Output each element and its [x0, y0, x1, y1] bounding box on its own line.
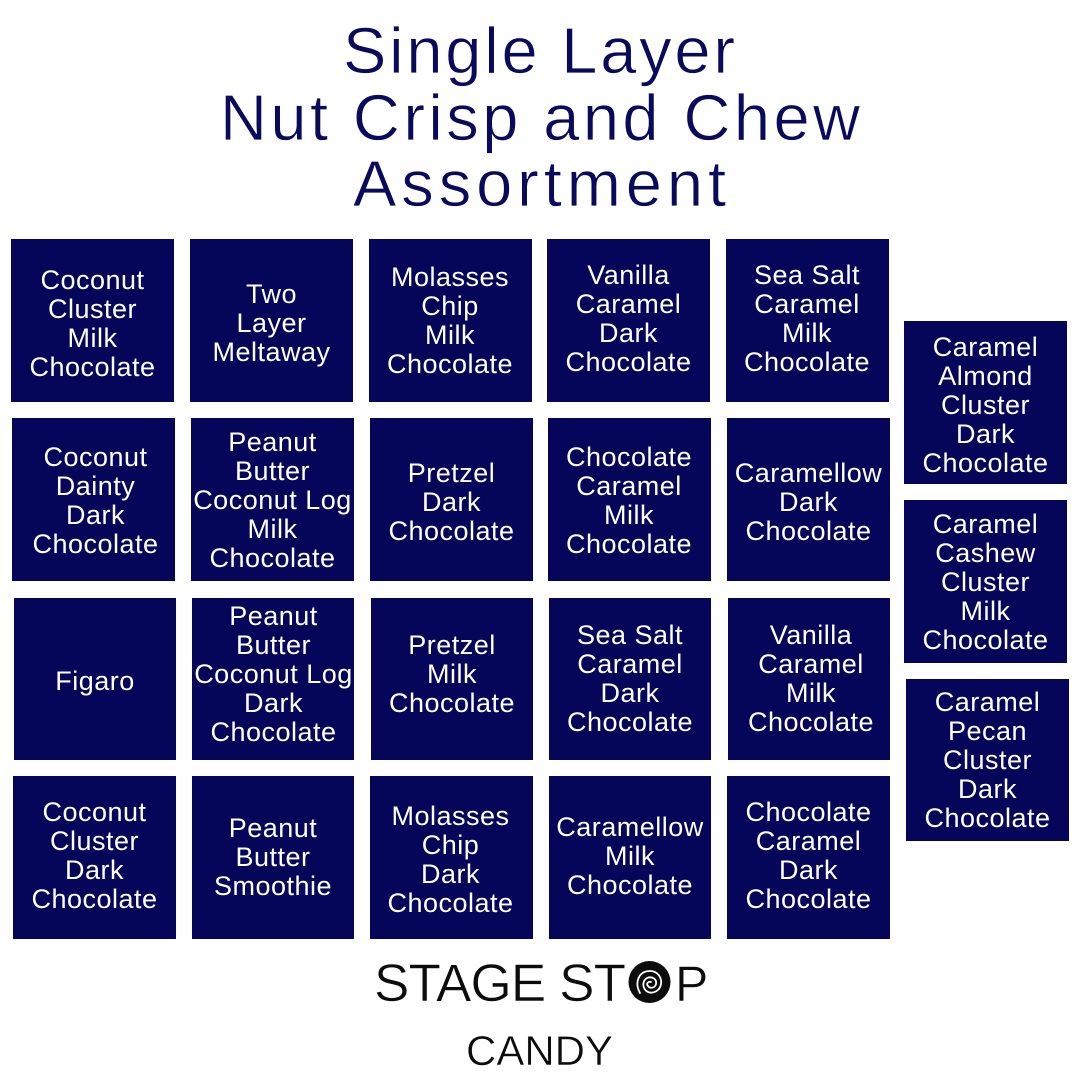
tile: Peanut Butter Smoothie: Butter	[235, 842, 311, 872]
tile: Peanut Butter Coconut Log Dark Chocolate: Chocolate	[210, 717, 337, 747]
tile: Caramel Cashew Cluster Milk Chocolate: Caramel	[933, 509, 1038, 539]
tile: Caramel Cashew Cluster Milk Chocolate: Cluster	[941, 567, 1030, 597]
tile: Molasses Chip Dark Chocolate: Chocolate	[387, 888, 514, 918]
tile: Peanut Butter Smoothie	[192, 776, 354, 939]
tile: Molasses Chip Milk Chocolate: Chip	[421, 291, 479, 321]
tile: Molasses Chip Milk Chocolate: Milk	[425, 320, 475, 350]
title	[220, 14, 861, 220]
tile: Coconut Cluster Dark Chocolate: Coconut	[42, 797, 147, 827]
tile: Sea Salt Caramel Milk Chocolate: Chocolate	[744, 347, 870, 377]
tile: Coconut Dainty Dark Chocolate: Coconut	[43, 442, 148, 472]
tile: Peanut Butter Coconut Log Milk Chocolate: Coconut Log	[193, 485, 352, 515]
tile: Figaro	[14, 598, 176, 760]
tile: Two Layer Meltaway: Two	[246, 279, 297, 309]
tile: Sea Salt Caramel Milk Chocolate: Sea Salt	[754, 260, 860, 290]
tile: Sea Salt Caramel Milk Chocolate: Caramel	[754, 289, 860, 319]
tile: Chocolate Caramel Dark Chocolate: Chocolate	[745, 797, 872, 827]
tile: Two Layer Meltaway	[190, 239, 353, 402]
tile: Vanilla Caramel Dark Chocolate: Chocolate	[565, 347, 692, 377]
tile: Caramel Pecan Cluster Dark Chocolate	[906, 679, 1069, 841]
tile: Caramel Cashew Cluster Milk Chocolate: Milk	[960, 596, 1010, 626]
tile: Caramel Pecan Cluster Dark Chocolate: Dark	[958, 774, 1017, 804]
tile: Pretzel Milk Chocolate: Chocolate	[389, 688, 515, 718]
tile: Peanut Butter Smoothie: Smoothie	[214, 871, 332, 901]
title: Assortment	[353, 147, 726, 220]
tile: Pretzel Dark Chocolate: Dark	[422, 487, 481, 517]
tile: Peanut Butter Coconut Log Dark Chocolate: Coconut Log	[194, 659, 353, 689]
title: Single Layer	[343, 14, 735, 87]
tile: Figaro: Figaro	[55, 666, 135, 696]
tile: Coconut Cluster Milk Chocolate	[11, 239, 174, 402]
tile: Chocolate Caramel Dark Chocolate: Caramel	[756, 826, 861, 856]
tile: Chocolate Caramel Milk Chocolate: Caramel	[576, 471, 682, 501]
tile: Pretzel Dark Chocolate	[370, 418, 533, 581]
logo: Stage Stop Candy: CANDY	[466, 1027, 613, 1074]
tile: Sea Salt Caramel Dark Chocolate: Caramel	[577, 649, 683, 679]
tile: Caramel Almond Cluster Dark Chocolate: Chocolate	[922, 448, 1049, 478]
tile: Chocolate Caramel Milk Chocolate	[548, 418, 711, 581]
tile: Caramellow Dark Chocolate	[727, 418, 890, 581]
tile: Sea Salt Caramel Dark Chocolate: Sea Salt	[577, 620, 683, 650]
tile: Sea Salt Caramel Dark Chocolate: Chocolate	[567, 707, 693, 737]
tile: Peanut Butter Coconut Log Dark Chocolate: Dark	[244, 688, 303, 718]
tile: Caramellow Dark Chocolate: Caramellow	[735, 458, 882, 488]
tile: Coconut Cluster Dark Chocolate	[13, 776, 176, 939]
tile: Vanilla Caramel Milk Chocolate	[728, 598, 890, 760]
tile: Coconut Dainty Dark Chocolate: Dark	[66, 500, 125, 530]
tile: Pretzel Milk Chocolate	[371, 598, 533, 760]
tile: Peanut Butter Coconut Log Milk Chocolate: Chocolate	[209, 543, 336, 573]
tile: Vanilla Caramel Dark Chocolate: Vanilla	[587, 260, 670, 290]
tile: Sea Salt Caramel Dark Chocolate: Dark	[600, 678, 660, 708]
tile: Caramel Cashew Cluster Milk Chocolate: Cashew	[935, 538, 1036, 568]
tile: Chocolate Caramel Milk Chocolate: Milk	[604, 500, 654, 530]
tile: Chocolate Caramel Dark Chocolate: Dark	[779, 855, 838, 885]
logo: Stage Stop Candy: P	[675, 956, 708, 1012]
tile: Caramellow Milk Chocolate: Milk	[605, 841, 655, 871]
tile: Caramellow Dark Chocolate: Dark	[779, 487, 838, 517]
tile: Molasses Chip Dark Chocolate	[370, 776, 533, 939]
tile: Sea Salt Caramel Milk Chocolate: Milk	[782, 318, 832, 348]
tile: Molasses Chip Milk Chocolate: Molasses	[391, 262, 509, 292]
tile: Caramel Pecan Cluster Dark Chocolate: Chocolate	[924, 803, 1051, 833]
tile: Peanut Butter Coconut Log Milk Chocolate: Butter	[235, 456, 310, 486]
tile: Chocolate Caramel Milk Chocolate: Chocolate	[566, 529, 692, 559]
tile: Coconut Cluster Milk Chocolate: Cluster	[48, 294, 137, 324]
tile: Caramel Almond Cluster Dark Chocolate: Dark	[956, 419, 1015, 449]
tile: Caramel Cashew Cluster Milk Chocolate: Chocolate	[922, 625, 1049, 655]
tile: Pretzel Milk Chocolate: Pretzel	[408, 630, 496, 660]
tile: Coconut Cluster Milk Chocolate: Coconut	[40, 265, 145, 295]
tile: Coconut Dainty Dark Chocolate: Dainty	[56, 471, 135, 501]
tile: Caramellow Milk Chocolate	[549, 776, 711, 939]
tile: Molasses Chip Dark Chocolate: Molasses	[391, 801, 510, 831]
tile: Pretzel Milk Chocolate: Milk	[427, 659, 477, 689]
tile: Caramel Pecan Cluster Dark Chocolate: Cluster	[943, 745, 1032, 775]
tile: Peanut Butter Coconut Log Dark Chocolate	[192, 598, 354, 760]
tile: Molasses Chip Milk Chocolate: Chocolate	[387, 349, 513, 379]
tile: Coconut Cluster Milk Chocolate: Milk	[68, 323, 118, 353]
tile: Caramel Almond Cluster Dark Chocolate: Cluster	[941, 390, 1030, 420]
tile: Caramellow Dark Chocolate: Chocolate	[745, 516, 872, 546]
tile: Peanut Butter Coconut Log Dark Chocolate: Peanut	[229, 601, 318, 631]
tile: Vanilla Caramel Milk Chocolate: Chocolate	[748, 707, 874, 737]
tile: Coconut Dainty Dark Chocolate: Chocolate	[32, 529, 159, 559]
tile: Molasses Chip Dark Chocolate: Chip	[422, 830, 479, 860]
tile: Vanilla Caramel Dark Chocolate: Caramel	[576, 289, 681, 319]
tile: Peanut Butter Coconut Log Dark Chocolate: Butter	[236, 630, 311, 660]
tile: Two Layer Meltaway: Meltaway	[212, 337, 331, 367]
tile: Caramel Almond Cluster Dark Chocolate: Caramel	[933, 332, 1038, 362]
tile: Caramel Almond Cluster Dark Chocolate	[904, 321, 1067, 484]
tile: Peanut Butter Coconut Log Milk Chocolate	[191, 418, 354, 581]
tile: Vanilla Caramel Milk Chocolate: Milk	[786, 678, 836, 708]
tile: Caramel Cashew Cluster Milk Chocolate	[904, 500, 1067, 663]
tile: Molasses Chip Milk Chocolate	[369, 239, 532, 402]
tile: Vanilla Caramel Milk Chocolate: Caramel	[758, 649, 864, 679]
logo: Stage Stop Candy: STAGE ST	[374, 954, 626, 1013]
tile: Chocolate Caramel Milk Chocolate: Chocolate	[566, 442, 692, 472]
tile: Sea Salt Caramel Dark Chocolate	[549, 598, 711, 760]
tile: Vanilla Caramel Dark Chocolate	[547, 239, 710, 402]
tile: Molasses Chip Dark Chocolate: Dark	[421, 859, 480, 889]
tile: Two Layer Meltaway: Layer	[236, 308, 307, 338]
tile: Coconut Dainty Dark Chocolate	[12, 418, 175, 581]
tile: Peanut Butter Smoothie: Peanut	[229, 813, 317, 843]
tile: Caramellow Milk Chocolate: Chocolate	[567, 870, 693, 900]
tile: Caramel Pecan Cluster Dark Chocolate: Pecan	[948, 716, 1027, 746]
tile: Coconut Cluster Dark Chocolate: Cluster	[50, 826, 139, 856]
title: Nut Crisp and Chew	[220, 81, 861, 154]
tile: Caramel Almond Cluster Dark Chocolate: Almond	[938, 361, 1033, 391]
tile: Vanilla Caramel Milk Chocolate: Vanilla	[770, 620, 852, 650]
tile: Sea Salt Caramel Milk Chocolate	[726, 239, 889, 402]
tile: Chocolate Caramel Dark Chocolate	[727, 776, 890, 939]
tile: Caramellow Milk Chocolate: Caramellow	[556, 812, 704, 842]
tile: Coconut Cluster Milk Chocolate: Chocolate	[29, 352, 156, 382]
tile: Pretzel Dark Chocolate: Pretzel	[408, 458, 495, 488]
tile: Pretzel Dark Chocolate: Chocolate	[388, 516, 515, 546]
tile: Coconut Cluster Dark Chocolate: Dark	[65, 855, 124, 885]
tile: Chocolate Caramel Dark Chocolate: Chocolate	[745, 884, 872, 914]
tile: Peanut Butter Coconut Log Milk Chocolate: Milk	[248, 514, 298, 544]
tile: Caramel Pecan Cluster Dark Chocolate: Caramel	[935, 687, 1040, 717]
tile: Peanut Butter Coconut Log Milk Chocolate: Peanut	[228, 427, 317, 457]
tile: Coconut Cluster Dark Chocolate: Chocolate	[31, 884, 158, 914]
tile: Vanilla Caramel Dark Chocolate: Dark	[599, 318, 658, 348]
